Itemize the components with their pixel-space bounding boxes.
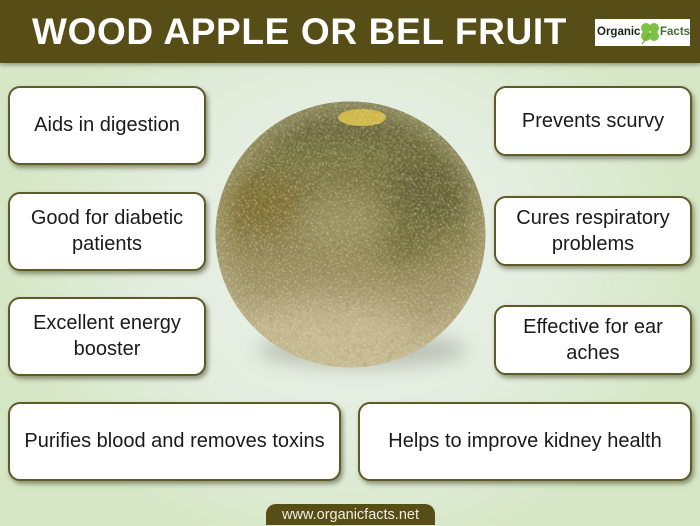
box: Effective for ear aches: Effective for ear: [523, 316, 663, 338]
fruit: wood apple: [216, 102, 486, 376]
logo: Organic Facts: Organic: [597, 26, 640, 38]
box: Effective for ear aches: [494, 305, 692, 375]
fruit stem scar: [338, 109, 386, 126]
title: WOOD APPLE OR BEL FRUIT: [32, 11, 567, 52]
header bar: [0, 0, 700, 63]
box: Aids in digestion: Aids in digestion: [34, 114, 180, 136]
box: Good for diabetic patients: patients: [72, 233, 142, 255]
box: Prevents scurvy: Prevents scurvy: [522, 110, 664, 132]
footer: website: [266, 504, 435, 525]
box: Cures respiratory problems: [494, 196, 692, 266]
box: Prevents scurvy: [494, 86, 692, 156]
box: Helps to improve kidney health: Helps to improve kidney health: [388, 430, 662, 452]
box: Excellent energy booster: Excellent energy: [33, 312, 181, 334]
box: Aids in digestion: [8, 86, 206, 165]
box: Helps to improve kidney health: [358, 402, 692, 481]
box: Good for diabetic patients: [8, 192, 206, 271]
box: Effective for ear aches: aches: [566, 342, 620, 364]
box: Excellent energy booster: [8, 297, 206, 376]
box: Cures respiratory problems: Cures respiratory: [516, 206, 670, 228]
box: Excellent energy booster: booster: [74, 338, 140, 360]
box: Cures respiratory problems: problems: [552, 232, 634, 254]
box: Good for diabetic patients: Good for diabetic: [31, 207, 183, 229]
icon: clover: [641, 23, 659, 44]
box: Purifies blood and removes toxins: Purifies blood and removes toxins: [24, 430, 325, 452]
fruit shadow: [257, 332, 467, 368]
logo: Organic Facts: Facts: [660, 26, 690, 38]
footer: website: www.organicfacts.net: [282, 507, 419, 523]
box: Purifies blood and removes toxins: [8, 402, 341, 481]
logo: Organic Facts: [595, 19, 690, 46]
